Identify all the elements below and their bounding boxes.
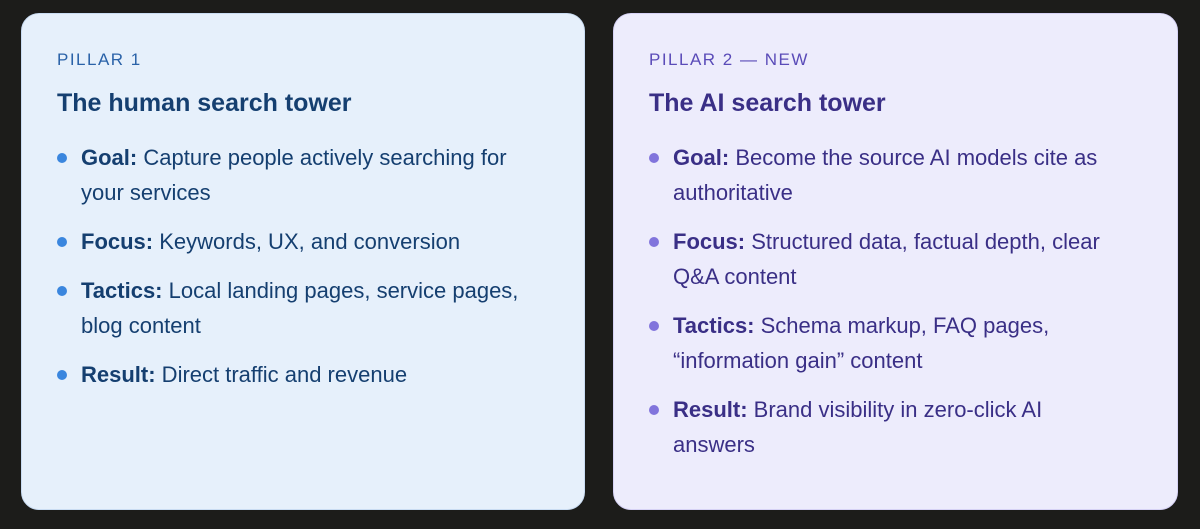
heading: human search tower: The human search tower (57, 89, 352, 117)
label: pillar 2: PILLAR 2 — NEW (649, 50, 809, 69)
bullet list: pillar 1: Result: Direct traffic and revenue (81, 362, 407, 387)
bullet list: pillar 2: Goal: Become the source AI models cite as authoritative (673, 145, 1097, 205)
bullet list: pillar 2: Tactics: Schema markup, FAQ pages, “information gain” content (673, 313, 1049, 373)
bullet list: pillar 2 (649, 145, 1100, 457)
bullet list: pillar 1: Goal: Capture people actively searching for your services (81, 145, 507, 205)
panel: pillar 2 (613, 13, 1178, 510)
heading: AI search tower: The AI search tower (649, 89, 886, 117)
bullet list: pillar 2: Result: Brand visibility in zero-click AI answers (673, 397, 1042, 457)
label: pillar 1: PILLAR 1 (57, 50, 142, 69)
bullet list: pillar 1: Tactics: Local landing pages, service pages, blog content (81, 278, 518, 338)
panel: pillar 1 (21, 13, 585, 510)
bullet list: pillar 1: Focus: Keywords, UX, and conversion (81, 229, 460, 254)
bullet list: pillar 2: Focus: Structured data, factual depth, clear Q&A content (673, 229, 1100, 289)
bullet list: pillar 1 (57, 145, 518, 387)
